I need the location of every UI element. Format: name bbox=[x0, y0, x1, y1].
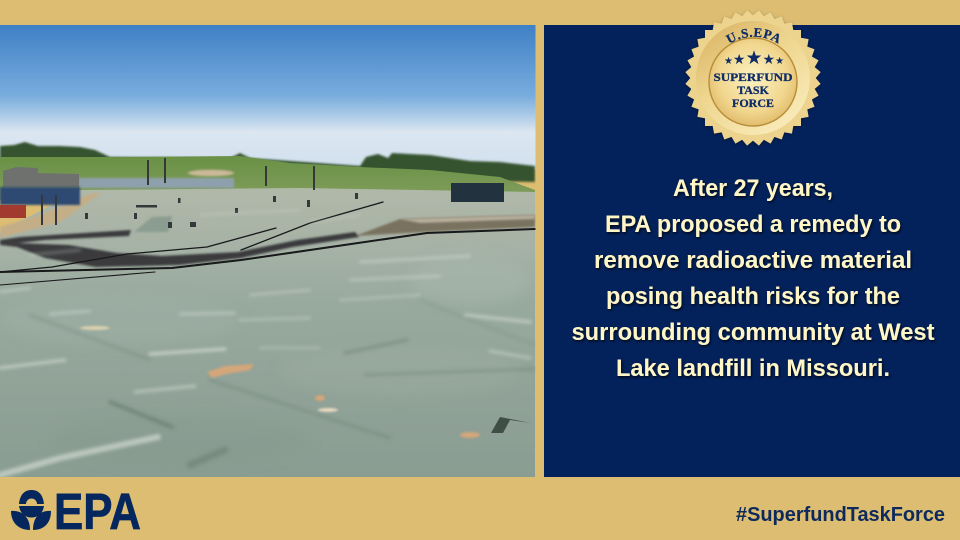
seal serrated edge bbox=[685, 10, 821, 146]
headline statement: After 27 years, bbox=[673, 175, 833, 202]
green hillside bbox=[0, 156, 535, 200]
light patch of cover bbox=[134, 216, 172, 232]
headline statement: surrounding community at West bbox=[572, 319, 934, 346]
broad light and dark tones on the cover bbox=[0, 255, 530, 465]
torn flap bbox=[491, 417, 531, 433]
hashtag: #SuperfundTaskForce bbox=[736, 504, 945, 526]
black pipes bbox=[0, 202, 535, 285]
seal label: SUPERFUND bbox=[714, 70, 793, 84]
left slope bbox=[0, 193, 100, 238]
warehouse buildings bbox=[3, 167, 79, 187]
headline statement bbox=[572, 175, 934, 382]
red equipment bbox=[0, 205, 26, 218]
scattered equipment on the cap bbox=[41, 158, 358, 228]
seal arc text: U.S.EPA bbox=[725, 28, 779, 44]
gravel strip bbox=[355, 215, 535, 236]
buildings and fence bbox=[0, 167, 234, 218]
exposed tan patches bbox=[80, 326, 480, 438]
headline statement: remove radioactive material bbox=[594, 247, 912, 274]
wrinkle shadows bbox=[30, 300, 535, 465]
yard storage bbox=[0, 187, 80, 205]
bare patch on hillside bbox=[188, 170, 234, 176]
EPA wordmark: EPA bbox=[54, 483, 141, 540]
dark geotextile strip bbox=[0, 230, 359, 267]
seal inner disc bbox=[709, 38, 797, 126]
seal label: FORCE bbox=[732, 96, 774, 110]
fence line bbox=[79, 178, 234, 188]
seal outer ring bbox=[696, 21, 810, 135]
seal label: TASK bbox=[737, 83, 770, 97]
seal stars: ★★★★★ bbox=[724, 47, 784, 69]
photo: covered West Lake landfill under a blue sky bbox=[0, 25, 536, 477]
seal: U.S. EPA Superfund Task Force bbox=[685, 10, 821, 146]
headline statement: EPA proposed a remedy to bbox=[605, 211, 901, 238]
icon: EPA flower mark bbox=[11, 490, 51, 530]
headline statement: posing health risks for the bbox=[606, 283, 900, 310]
sky with clouds bbox=[0, 25, 536, 170]
covered ground bbox=[0, 188, 535, 477]
tree line bbox=[0, 142, 535, 182]
dark containers bbox=[451, 183, 504, 202]
EPA logo bbox=[11, 483, 141, 540]
wrinkle highlights bbox=[0, 210, 530, 475]
navy text panel bbox=[544, 25, 960, 477]
headline statement: Lake landfill in Missouri. bbox=[616, 355, 890, 382]
